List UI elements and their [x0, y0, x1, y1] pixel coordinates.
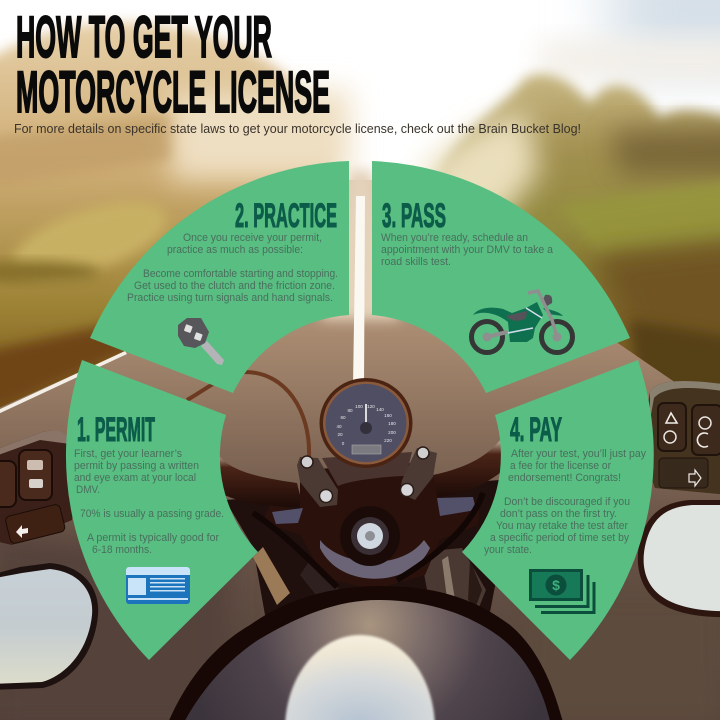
- body text: pass: appointment with your DMV to take a: [381, 244, 554, 256]
- subtitle: For more details on specific state laws to get your motorcycle license, check out the Brain Bucket Blog!: [14, 122, 581, 136]
- icon: stack of money: $: [552, 577, 560, 593]
- speedometer: 40: [336, 424, 342, 429]
- step segment: 1. permit: 1. PERMIT: [77, 411, 155, 449]
- body text: pay: After your test, you’ll just pay: [511, 448, 646, 460]
- step segment: 3. pass: [372, 161, 630, 393]
- title: HOW TO GET YOUR: [16, 5, 272, 70]
- speedometer: [320, 378, 412, 468]
- body text: permit: [74, 448, 224, 556]
- body text: pay: endorsement! Congrats!: [508, 472, 621, 484]
- icon: id card: [126, 567, 190, 604]
- body text: pay: your state.: [484, 544, 532, 556]
- motorcycle cockpit: [0, 372, 720, 720]
- speedometer: 60: [340, 415, 346, 420]
- body text: practice: [127, 232, 338, 304]
- step segment: 2. practice: [90, 161, 349, 393]
- speedometer: 140: [376, 407, 384, 412]
- speedometer: 120: [367, 404, 375, 409]
- body text: practice: practice as much as possible:: [167, 244, 303, 256]
- right riser: [400, 448, 437, 500]
- icon: car key: [178, 318, 224, 365]
- body text: pay: [484, 448, 646, 556]
- speedometer: 20: [337, 432, 343, 437]
- body text: pay: You may retake the test after: [496, 520, 628, 532]
- body text: practice: Once you receive your permit,: [183, 232, 322, 244]
- body text: practice: Become comfortable starting and stopping.: [143, 268, 338, 280]
- body text: pass: road skills test.: [381, 256, 451, 268]
- body text: permit: A permit is typically good for: [87, 532, 219, 544]
- speedometer: 100: [355, 404, 363, 409]
- body text: pay: Don’t be discouraged if you: [504, 496, 630, 508]
- body text: permit: First, get your learner’s: [74, 448, 182, 460]
- brake cable: [187, 372, 309, 458]
- step segment: 2. practice: 2. PRACTICE: [235, 197, 337, 235]
- icon: motorcycle: [472, 291, 572, 352]
- speedometer: 200: [388, 430, 396, 435]
- body text: permit: and eye exam at your local: [74, 472, 196, 484]
- left riser: [297, 457, 338, 507]
- road edge line: [0, 351, 127, 414]
- step segment: 1. permit: [66, 360, 258, 660]
- body text: practice: Get used to the clutch and the friction zone.: [134, 280, 335, 292]
- text: MOTORCYCLE LICENSE: [16, 60, 330, 125]
- body text: pay: don’t pass on the first try.: [500, 508, 617, 520]
- title: [16, 5, 330, 125]
- heading: 4. pay: 4. PAY: [510, 411, 562, 449]
- right switch cluster: [640, 381, 720, 495]
- handlebar right: [430, 430, 520, 497]
- speedometer: 160: [384, 413, 392, 418]
- road shadow lower left: [0, 530, 230, 720]
- step segment: 4. pay: [462, 360, 654, 660]
- centre road line: [353, 196, 365, 386]
- heading: 3. pass: 3. PASS: [382, 197, 446, 235]
- body text: pay: a specific period of time set by: [490, 532, 629, 544]
- speedometer: 180: [388, 421, 396, 426]
- left mirror: [0, 563, 98, 690]
- triple tree body: [253, 462, 483, 590]
- tree line and field right: [420, 74, 720, 460]
- icon: stack of money: [529, 569, 596, 614]
- road shadow lower right: [510, 590, 720, 720]
- dash bracket: [322, 452, 412, 486]
- left switch cluster: [0, 430, 76, 545]
- bolts: [301, 447, 429, 502]
- body text: permit: DMV.: [76, 484, 100, 496]
- body text: permit: permit by passing a written: [74, 460, 199, 472]
- tan blur left: [0, 22, 350, 430]
- body text: pay: a fee for the license or: [510, 460, 611, 472]
- ignition cap: [340, 506, 400, 566]
- speedometer: 80: [347, 408, 353, 413]
- body text: permit: 6-18 months.: [92, 544, 152, 556]
- fuel tank: [165, 586, 565, 720]
- forks and lower triple: [225, 480, 505, 632]
- sky haze upper right: [540, 0, 720, 80]
- handlebar left: [200, 445, 303, 507]
- road surface: [0, 180, 720, 720]
- body text: pass: When you’re ready, schedule an: [381, 232, 528, 244]
- body text: pass: [381, 232, 554, 268]
- speedometer: 0: [342, 441, 345, 446]
- body text: permit: 70% is usually a passing grade.: [80, 508, 224, 520]
- speedometer: 220: [384, 438, 392, 443]
- right mirror: [638, 500, 720, 617]
- body text: practice: Practice using turn signals and hand signals.: [127, 292, 333, 304]
- centre road glow: [320, 170, 400, 320]
